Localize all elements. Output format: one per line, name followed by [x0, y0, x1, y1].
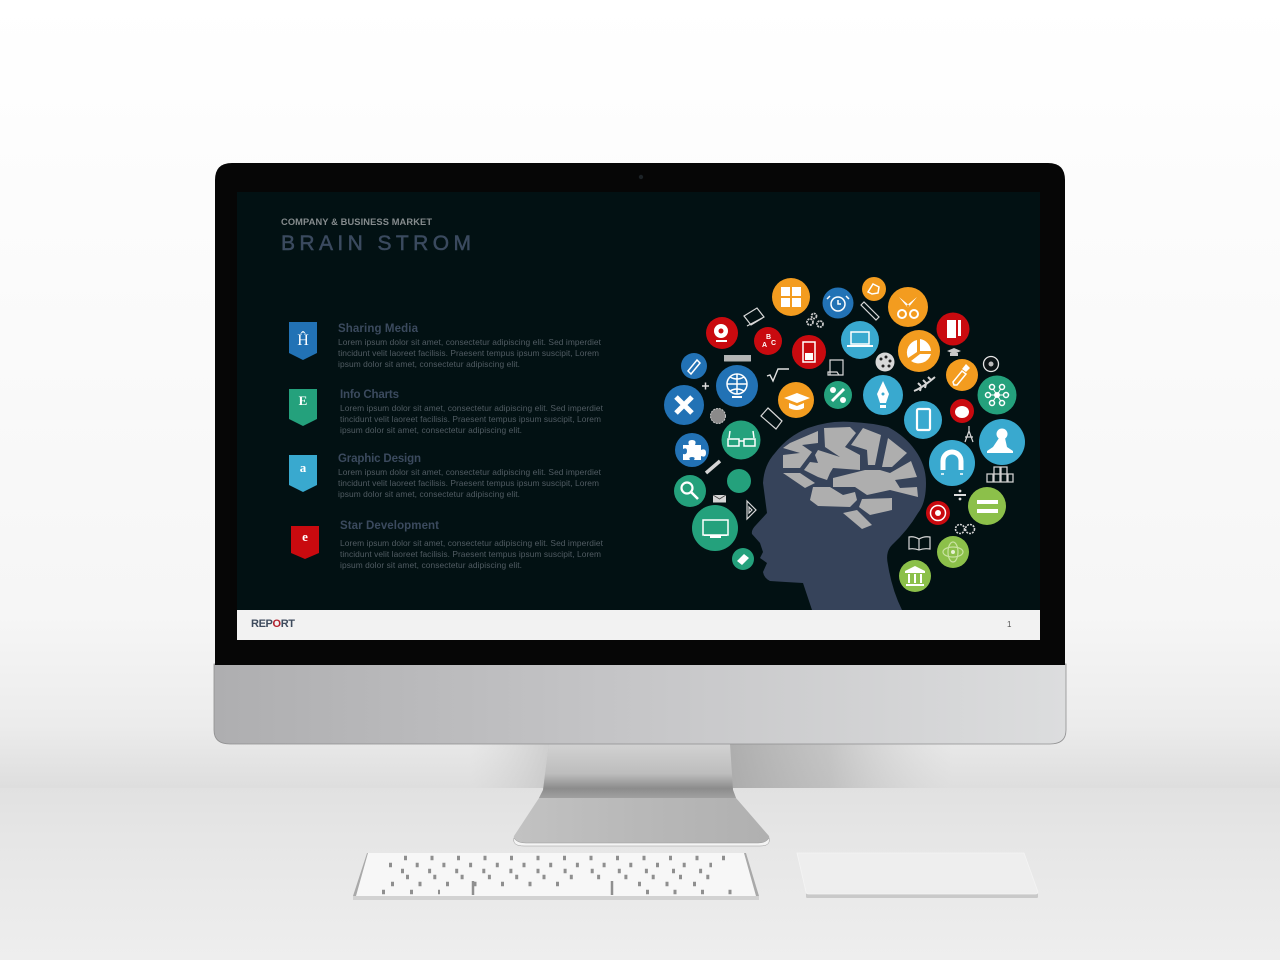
- text block: ipsum dolor sit amet, consectetur adipiscing elit.: [338, 489, 520, 499]
- text block: tincidunt velit laoreet facilisis. Praesent tempus ipsum suscipit, Lorem: [340, 549, 601, 559]
- footer bar: [237, 610, 1040, 640]
- icon: webcam: [706, 317, 738, 349]
- icon: abc: A: [762, 342, 767, 349]
- icon: equals: [968, 487, 1006, 525]
- icon: soccer ball: [984, 356, 998, 372]
- text block: tincidunt velit laoreet facilisis. Praesent tempus ipsum suscipit, Lorem: [338, 348, 599, 358]
- icon: red shield: e: [302, 529, 308, 544]
- icon: glasses: [722, 420, 760, 460]
- text block: ipsum dolor sit amet, consectetur adipiscing elit.: [340, 425, 522, 435]
- icon: puzzle: [675, 433, 709, 467]
- panel: star development: [291, 520, 604, 570]
- icon: wheat: [914, 377, 935, 391]
- icon: teal shield: a: [300, 460, 307, 475]
- icon: network: [978, 376, 1016, 414]
- subtitle: COMPANY & BUSINESS MARKET: [281, 217, 432, 227]
- monitor body: [214, 163, 1066, 744]
- panel: sharing media: [289, 322, 602, 369]
- monitor bezel: [215, 163, 1065, 665]
- title: BRAIN STROM: [281, 232, 471, 255]
- text block: Lorem ipsum dolor sit amet, consectetur adipiscing elit. Sed imperdiet: [338, 467, 602, 477]
- icon: calculator: [772, 278, 810, 316]
- footer label: REPORT: [251, 618, 295, 630]
- icon: green dot: [727, 469, 751, 493]
- slide background: [237, 192, 1040, 610]
- heading: Graphic Design: [338, 453, 421, 465]
- text block: tincidunt velit laoreet facilisis. Praesent tempus ipsum suscipit, Lorem: [338, 478, 599, 488]
- icon: laptop: [841, 321, 879, 359]
- heading: Info Charts: [340, 389, 399, 401]
- icon: gears: [807, 314, 823, 327]
- icon: open book: [909, 537, 930, 550]
- icon: atom: [937, 536, 969, 568]
- text block: [338, 337, 602, 369]
- icon: pen nib: [863, 375, 903, 415]
- text block: ipsum dolor sit amet, consectetur adipiscing elit.: [340, 560, 522, 570]
- icon: alarm clock: [822, 288, 854, 318]
- icon: envelope: [713, 495, 726, 502]
- heading: Star Development: [340, 520, 439, 532]
- icon: blue shield: [289, 322, 317, 360]
- panel: info charts: [289, 389, 604, 435]
- icon: linked gears: [956, 524, 974, 534]
- icon: divide: [954, 494, 966, 496]
- icon: square root: [767, 369, 789, 381]
- icon: dropper: [946, 359, 978, 391]
- text block: tincidunt velit laoreet facilisis. Praesent tempus ipsum suscipit, Lorem: [340, 414, 601, 424]
- heading: Sharing Media: [338, 323, 419, 335]
- icon: plus: [702, 382, 709, 390]
- icon: tablet: [904, 401, 942, 439]
- icon: teal shield: [289, 455, 317, 492]
- icon: hand tablet: [828, 360, 843, 375]
- icon: green shield: [289, 389, 317, 426]
- monitor stand: [514, 744, 769, 846]
- icon: compass: [965, 426, 973, 442]
- icon: eraser: [732, 548, 754, 570]
- keyboard: [353, 853, 759, 900]
- icon: divide dots: [959, 490, 961, 500]
- monitor chin: [214, 664, 1066, 744]
- icon: book: [936, 312, 970, 346]
- icon: monitor: [692, 505, 738, 551]
- text block: ipsum dolor sit amet, consectetur adipiscing elit.: [338, 359, 520, 369]
- icon: red shield: [291, 526, 319, 559]
- icon: small amber badge: [862, 277, 886, 301]
- icon: tilted phone: [761, 408, 782, 429]
- background: desk: [0, 788, 1280, 960]
- icon: magnet: [929, 440, 975, 486]
- icon: palette: [876, 352, 894, 372]
- icon: person pawn: [979, 419, 1025, 465]
- icon: apple: [950, 399, 974, 423]
- text block: Lorem ipsum dolor sit amet, consectetur adipiscing elit. Sed imperdiet: [338, 337, 602, 347]
- text block: Lorem ipsum dolor sit amet, consectetur adipiscing elit. Sed imperdiet: [340, 403, 604, 413]
- icon: blue shield: Ĥ: [297, 330, 309, 349]
- icon: red calculator: [792, 335, 826, 369]
- icon: pencil: [706, 461, 720, 473]
- brain: [783, 427, 918, 529]
- icon: abc: B: [766, 334, 771, 341]
- page number: 1: [1007, 620, 1012, 629]
- icon: target: [926, 501, 950, 525]
- icon: abc: C: [771, 340, 776, 347]
- icon: diagonal ruler: [861, 302, 879, 320]
- text block: [340, 403, 604, 435]
- stand shadow on wall, right: [728, 744, 953, 788]
- icon: small cap: [947, 348, 961, 356]
- text block: [340, 538, 604, 570]
- icon: museum: [899, 560, 931, 592]
- text block: Lorem ipsum dolor sit amet, consectetur adipiscing elit. Sed imperdiet: [340, 538, 604, 548]
- icon: close cross: [664, 385, 704, 425]
- head: [752, 422, 926, 610]
- icon: percent tools: [824, 381, 852, 409]
- icon: green shield: E: [299, 393, 307, 408]
- icon: alphabet blocks: [987, 467, 1013, 482]
- webcam: [639, 175, 643, 179]
- icon: scissors: [888, 287, 928, 327]
- icon: triangle ruler: [747, 501, 756, 519]
- text block: [338, 467, 602, 499]
- icon: graduation cap: [778, 382, 814, 418]
- icon: outline laptop: [744, 308, 764, 326]
- icon: progress bar: [724, 356, 750, 361]
- icon: magnifier: [674, 475, 706, 507]
- icon: ball of type: [710, 408, 726, 424]
- title block: [281, 217, 471, 255]
- head silhouette with brain: [752, 422, 926, 610]
- small line icons: [702, 302, 1013, 550]
- panel: graphic design: [289, 453, 602, 499]
- icon: abc: [754, 327, 782, 355]
- icon: globe: [716, 365, 758, 407]
- stand shadow on wall, left: [470, 744, 550, 788]
- icon: ruler badge: [681, 353, 707, 379]
- icon: pie chart: [898, 330, 940, 372]
- trackpad: [797, 853, 1038, 898]
